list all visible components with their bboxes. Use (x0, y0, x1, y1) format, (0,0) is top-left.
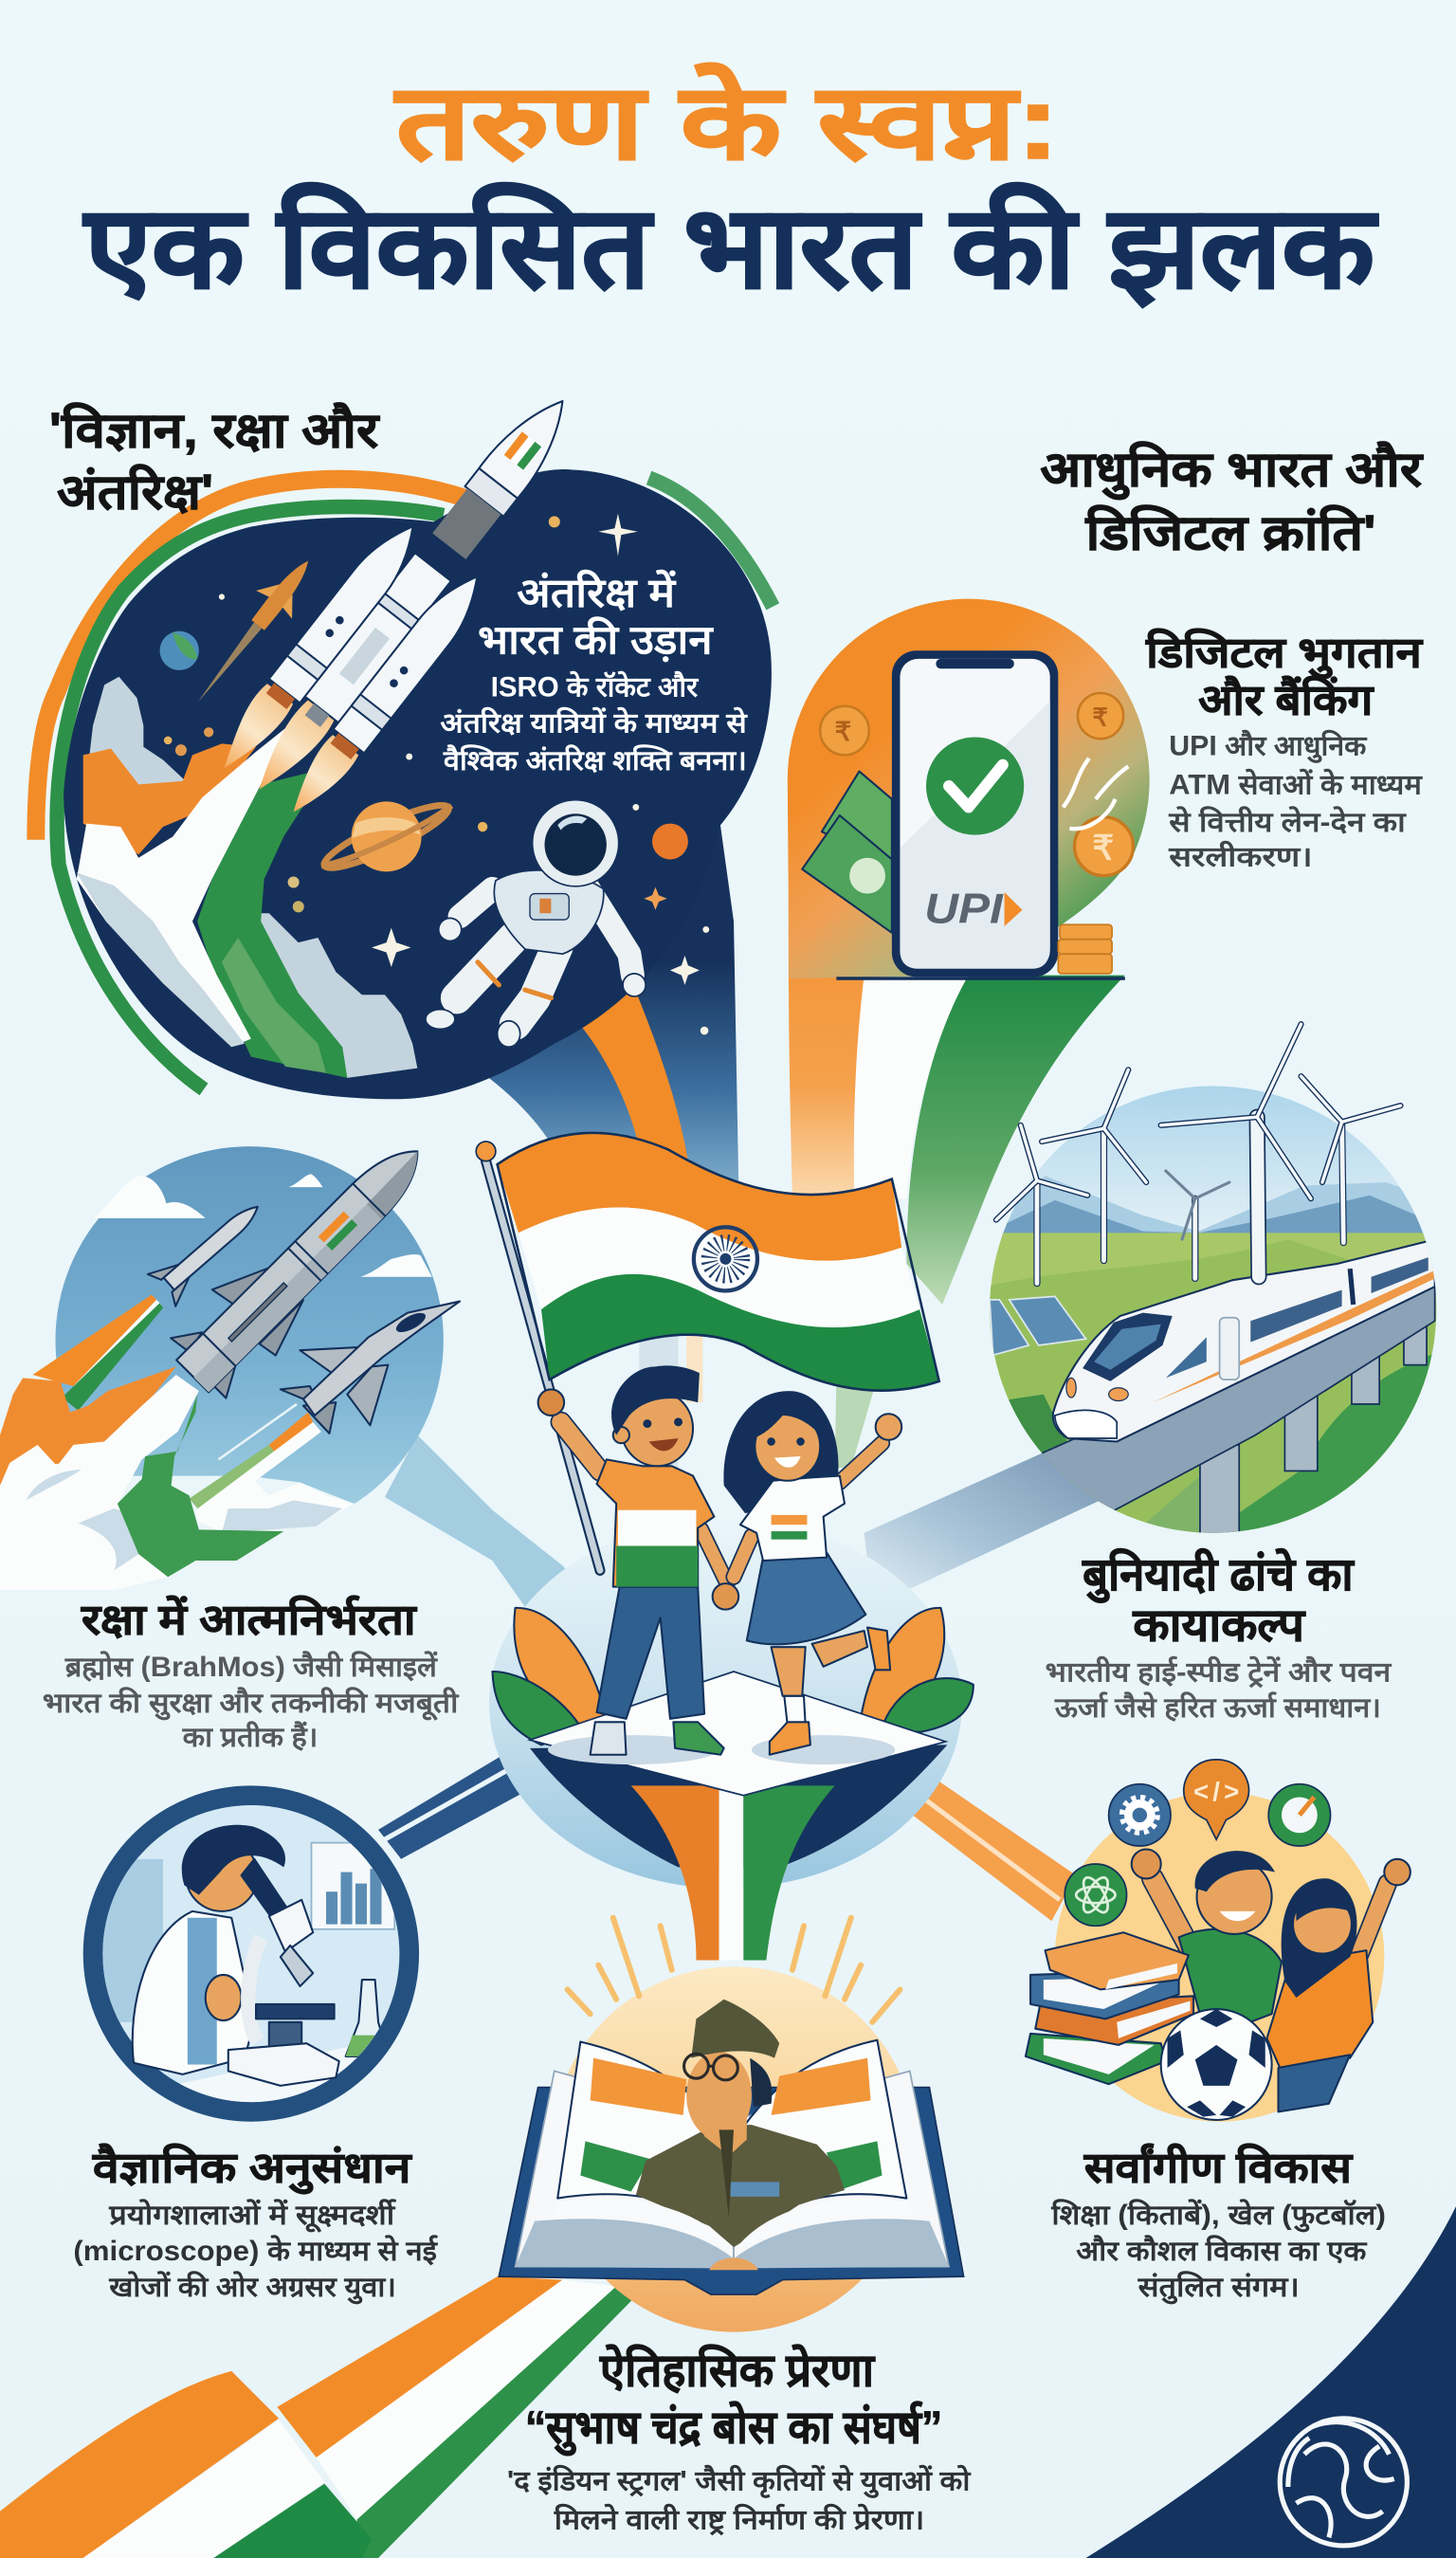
text: self-reliance in defence: ब्रह्मोस (BrahMos) जैसी मिसाइलें (64, 1651, 438, 1683)
right clouds (195, 1476, 354, 1533)
books (1026, 1932, 1193, 2084)
green plume (197, 768, 347, 1078)
book 2 (1030, 1970, 1179, 2019)
icon: gear bubble (1109, 1784, 1171, 1846)
text: all-round development: संतुलित संगम। (1137, 2271, 1300, 2305)
ring: green arc (57, 506, 444, 1089)
halo (551, 1966, 917, 2332)
white band (519, 1207, 919, 1327)
text: infrastructure transformation (1046, 1548, 1392, 1724)
text: infrastructure transformation: कायाकल्प (1132, 1599, 1306, 1651)
corner: navy swoosh (1086, 2206, 1456, 2558)
jet trail (190, 1404, 321, 1523)
white plume (77, 725, 288, 1047)
solar panels (990, 1296, 1086, 1355)
heading: modern India and digital revolution (1040, 441, 1424, 560)
text: historical inspiration (507, 2344, 972, 2536)
text: self-reliance in defence: भारत की सुरक्षा और तकनीकी मजबूती (43, 1687, 460, 1721)
text: India's flight in space (440, 569, 748, 777)
text: historical inspiration: 'द इंडियन स्ट्रगल' जैसी कृतियों से युवाओं को (507, 2464, 972, 2498)
text: scientific research: (microscope) के माध्यम से नई (73, 2235, 439, 2267)
panel: space (36, 364, 773, 1099)
text: infrastructure transformation: ऊर्जा जैसे हरित ऊर्जा समाधान। (1054, 1691, 1381, 1724)
limbs (457, 888, 632, 1024)
grey cloud behind (90, 677, 188, 799)
small missile trail (32, 1295, 163, 1411)
portrait (636, 2000, 845, 2247)
text: India's flight in space: भारत की उड़ान (478, 616, 715, 664)
stars (164, 514, 709, 1034)
text: all-round development: शिक्षा (किताबें), खेल (फुटबॉल) (1050, 2199, 1386, 2233)
left page (557, 2041, 731, 2242)
panel: all-round development (1026, 1760, 1410, 2122)
green cloud (118, 1395, 283, 1577)
lab wall items (101, 1843, 394, 2022)
text: scientific research: वैज्ञानिक अनुसंधान (92, 2143, 413, 2194)
right grey cloud (245, 913, 417, 1078)
book 3 (1035, 1996, 1193, 2045)
mountains (978, 1176, 1435, 1239)
wind turbines (996, 1024, 1401, 1284)
text: digital payments and banking: ATM सेवाओं के माध्यम (1169, 769, 1423, 801)
scientist (133, 1825, 285, 2074)
boy shoes (591, 1722, 724, 1755)
text: infrastructure transformation: भारतीय हाई-स्पीड ट्रेनें और पवन (1046, 1655, 1392, 1688)
flag outline (498, 1133, 939, 1391)
coins: ₹ (835, 717, 852, 746)
sun rays (568, 1918, 900, 2022)
ring: green arc on lobe (649, 478, 773, 607)
centre: boy (538, 1365, 727, 1755)
ribbon: tricolor stream into bottom-left flag (0, 2276, 643, 2558)
orange smoke (83, 743, 256, 854)
stream: tricolor from digital panel to centre (789, 815, 1125, 1305)
icon: code bubble: </> (1193, 1777, 1239, 1806)
heading: science, defence and space: अंतरिक्ष' (57, 464, 213, 520)
flames (209, 672, 368, 830)
right page (737, 2040, 906, 2242)
text: historical inspiration: ऐतिहासिक प्रेरणा (599, 2344, 875, 2396)
clouds and exhaust (77, 677, 417, 1078)
heading: science, defence and space: 'विज्ञान, रक्षा और (49, 401, 380, 457)
fairing (479, 386, 582, 499)
text: scientific research (73, 2143, 439, 2305)
logo (1280, 2419, 1407, 2546)
side pages (516, 2071, 949, 2267)
title line 1: तरुण के स्वप्न: (393, 63, 1060, 181)
lower greenery (1009, 1394, 1067, 1465)
boy head (611, 1365, 700, 1466)
ring (93, 1796, 410, 2111)
centre: Indian flag (476, 1133, 939, 1570)
helmet (533, 800, 619, 886)
text: India's flight in space: ISRO के रॉकेट और (491, 670, 699, 703)
peach disc (1055, 1792, 1384, 2122)
text: self-reliance in defence (43, 1595, 460, 1753)
microscope (228, 1859, 339, 2086)
boy shirt (597, 1459, 714, 1587)
text: digital payments and banking: से वित्तीय लेन-देन का (1168, 806, 1407, 838)
connector: sports panel to centre (881, 1758, 1076, 1921)
flask (346, 1980, 388, 2056)
boy (1132, 1849, 1282, 2038)
boy legs (597, 1587, 704, 1719)
arrows (1063, 758, 1128, 829)
girl shoes (770, 1628, 890, 1755)
banknotes (802, 772, 892, 933)
flag pole (476, 1142, 600, 1570)
text: scientific research: प्रयोगशालाओं में सूक्ष्मदर्शी (108, 2199, 397, 2233)
text: self-reliance in defence: रक्षा में आत्मनिर्भरता (81, 1595, 417, 1643)
main rocket (209, 364, 610, 831)
girl head (754, 1412, 825, 1481)
navy field (64, 469, 772, 1099)
text: India's flight in space: अंतरिक्ष यात्रियों के माध्यम से (440, 706, 748, 739)
page flag stripes (580, 2058, 883, 2192)
icon: palette bubble (1268, 1784, 1331, 1846)
centre: girl (713, 1391, 901, 1755)
panel: historical book (499, 1918, 964, 2332)
panel: digital payment (788, 599, 1150, 978)
stream: blue and orange from space panel to centre (482, 815, 738, 1182)
connector: train track to centre (864, 1441, 1128, 1606)
girl shirt (740, 1476, 845, 1561)
text: digital payments and banking (1145, 628, 1424, 872)
earth (160, 631, 199, 670)
sky (1028, 1087, 1399, 1231)
heading: modern India and digital revolution: आधुनिक भारत और (1040, 441, 1424, 501)
orange planet (652, 824, 688, 859)
text: self-reliance in defence: का प्रतीक हैं। (182, 1721, 318, 1753)
phone (892, 650, 1058, 977)
girl skirt (747, 1552, 865, 1644)
saturn (318, 795, 454, 877)
sky (55, 1146, 444, 1535)
UPI logo: UPI (924, 886, 1005, 933)
centre halo (489, 1520, 962, 1889)
check badge (926, 737, 1024, 835)
connector: missile panel to centre (385, 1435, 600, 1672)
panel: science lab (93, 1796, 424, 2136)
icon: atom bubble (1065, 1864, 1127, 1926)
text: India's flight in space: वैश्विक अंतरिक्ष शक्ति बनना। (443, 744, 747, 777)
girl hands (713, 1414, 901, 1610)
centre: platform funnel (530, 1745, 947, 1960)
main missile (159, 1118, 448, 1407)
astronaut (426, 800, 646, 1047)
text: all-round development (1050, 2143, 1386, 2305)
arch background (788, 599, 1150, 978)
small rocket (180, 547, 326, 717)
centre: platform top (530, 1672, 946, 1796)
viaduct pillars (1200, 1325, 1427, 1543)
girl hair (723, 1391, 839, 1513)
bench (163, 2030, 424, 2136)
title line 2: एक विकसित भारत की झलक (82, 183, 1379, 312)
heading: science, defence and space (49, 401, 380, 520)
pale streams behind the children (639, 1321, 877, 1517)
coin stack (1058, 924, 1112, 974)
panel: missiles (0, 1118, 460, 1590)
book 1 (1046, 1932, 1189, 1989)
jet (281, 1302, 460, 1434)
small missile (148, 1191, 271, 1306)
girl (1266, 1859, 1410, 2111)
coins: ₹ (1092, 828, 1114, 867)
text: all-round development: सर्वांगीण विकास (1083, 2143, 1354, 2191)
text: digital payments and banking: UPI और आधुनिक (1169, 729, 1368, 763)
text: infrastructure transformation: बुनियादी ढांचे का (1082, 1548, 1355, 1603)
orange band (498, 1133, 901, 1261)
field (978, 1233, 1451, 1543)
white cloud (0, 1375, 199, 1590)
train (1053, 1239, 1435, 1441)
grey cloud shading (27, 1470, 138, 1570)
torso (494, 870, 604, 954)
coins: ₹ (1092, 704, 1108, 731)
green band (541, 1274, 939, 1391)
book 4 (1026, 2034, 1166, 2084)
text: digital payments and banking: सरलीकरण। (1168, 840, 1313, 872)
ring: orange arc (36, 479, 468, 840)
viaduct deck (1041, 1282, 1435, 1511)
text: historical inspiration: “सुभाष चंद्र बोस का संघर्ष” (525, 2402, 942, 2457)
orange smoke (0, 1366, 176, 1486)
icon: code bubble (1184, 1760, 1249, 1839)
boy arms (561, 1422, 727, 1583)
football (1161, 2009, 1272, 2120)
girl arms (734, 1443, 883, 1577)
clouds (95, 1174, 432, 1277)
coins (820, 693, 1133, 876)
lower page stack (516, 2199, 949, 2270)
title (82, 63, 1379, 312)
cover and spine (499, 2088, 964, 2294)
text: India's flight in space: अंतरिक्ष में (517, 569, 676, 616)
connector: lab panel to centre (378, 1742, 551, 1859)
text: digital payments and banking: और बैंकिंग (1198, 675, 1374, 723)
text: historical inspiration: मिलने वाली राष्ट्र निर्माण की प्रेरणा। (554, 2504, 924, 2536)
text: digital payments and banking: डिजिटल भुगतान (1145, 628, 1424, 679)
grey shade on plume (77, 872, 245, 1047)
ashoka chakra (694, 1227, 757, 1290)
girl legs (772, 1631, 867, 1726)
panel: train and wind energy (990, 1021, 1437, 1533)
heading: modern India and digital revolution: डिजिटल क्रांति' (1084, 504, 1376, 560)
text: scientific research: खोजों की ओर अग्रसर युवा। (108, 2271, 396, 2305)
centre: leaves (492, 1608, 974, 1745)
text: all-round development: और कौशल विकास का एक (1076, 2235, 1368, 2267)
